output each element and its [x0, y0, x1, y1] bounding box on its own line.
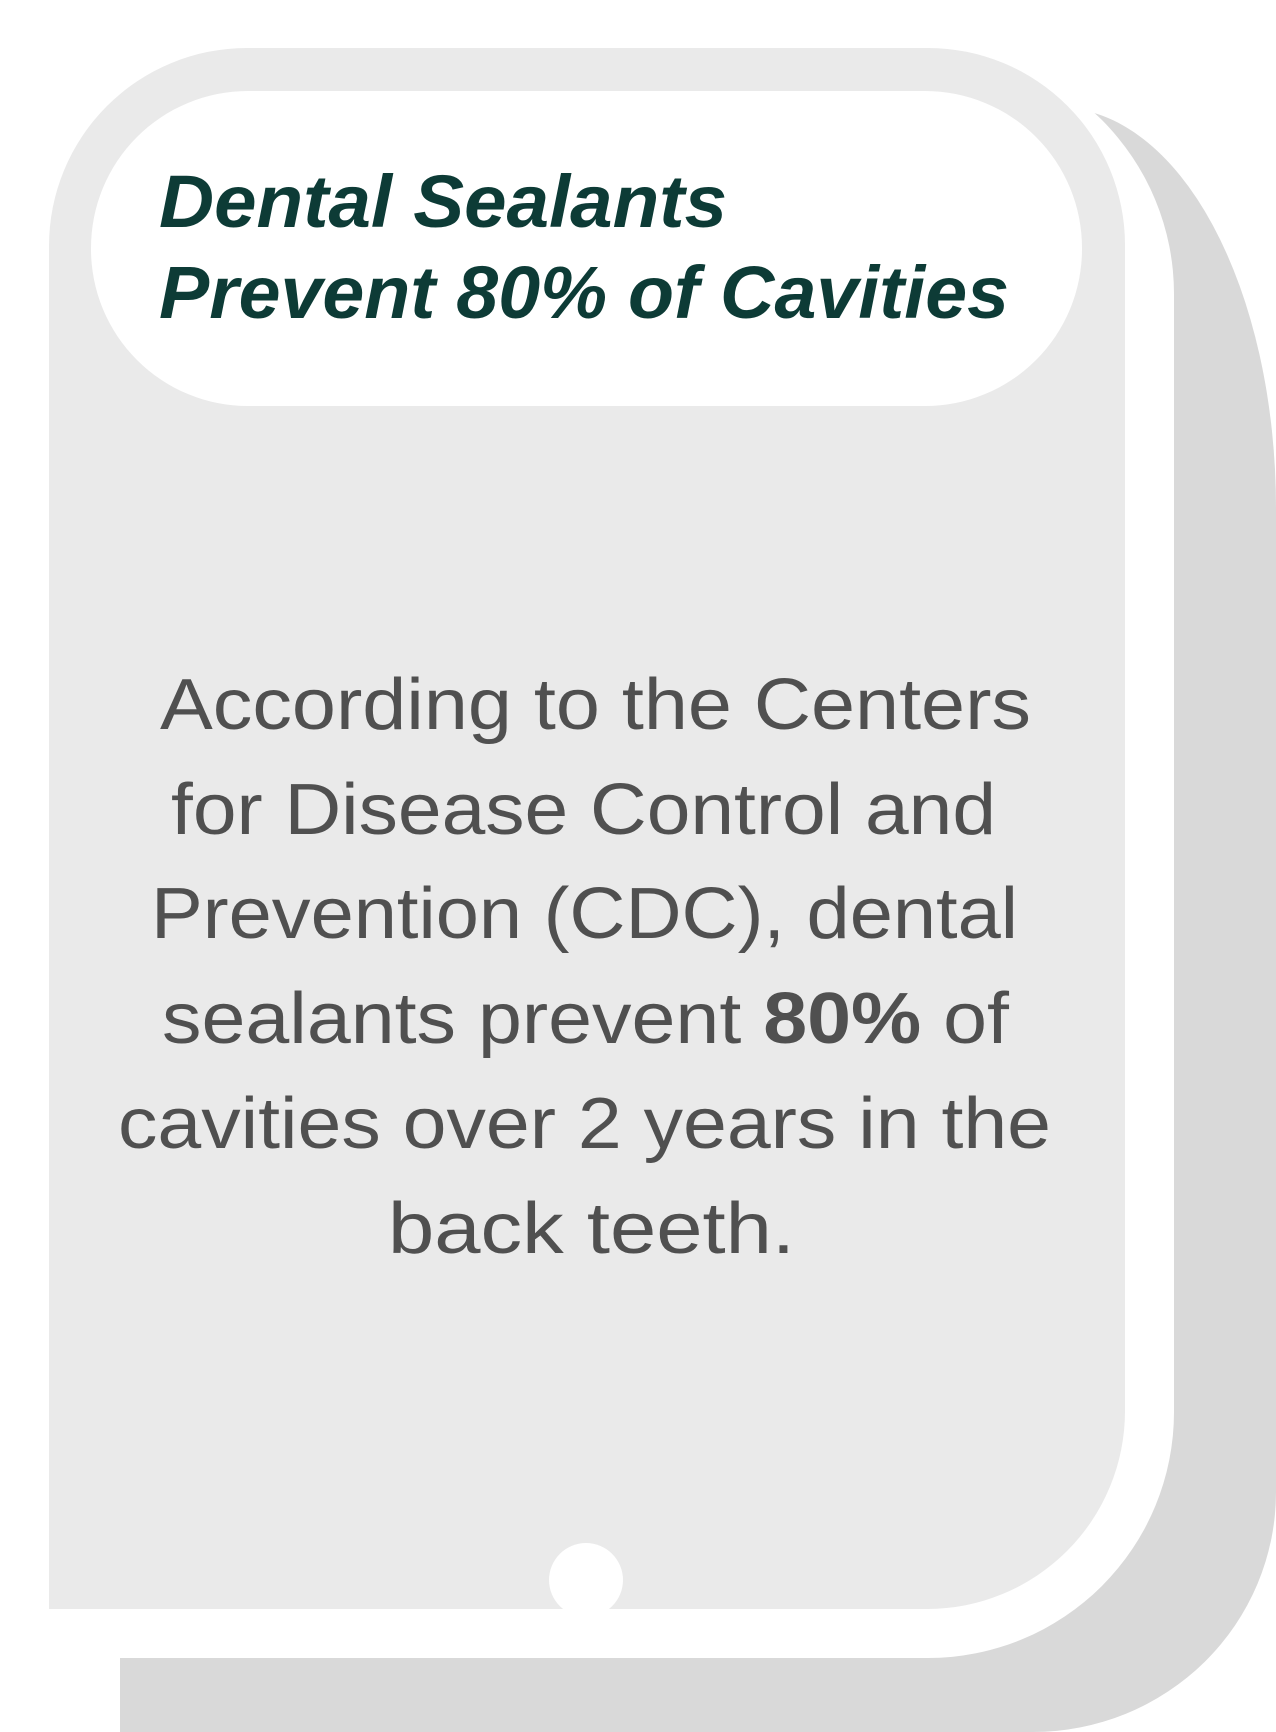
body text: back teeth.	[388, 1189, 795, 1269]
title: Prevent 80% of Cavities	[159, 251, 1009, 334]
notch circle	[549, 1543, 623, 1617]
body text: According to the Centers	[160, 665, 1031, 745]
body text: sealants prevent 80% of	[162, 979, 1001, 1059]
header pill	[91, 91, 1082, 406]
body text: cavities over 2 years in the	[118, 1084, 1051, 1164]
main card panel	[49, 48, 1125, 1609]
body text: for Disease Control and	[171, 770, 996, 850]
body text: Prevention (CDC), dental	[151, 874, 1018, 954]
title: Dental Sealants	[159, 160, 727, 243]
